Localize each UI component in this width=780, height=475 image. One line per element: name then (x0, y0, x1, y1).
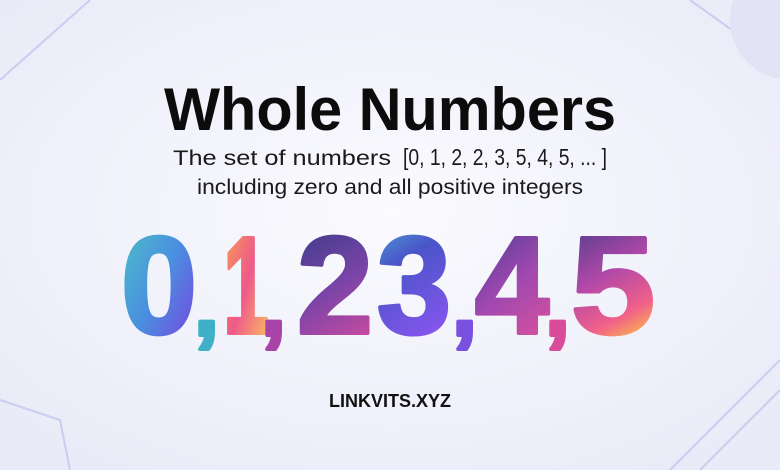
big digits: , (452, 255, 477, 355)
footer url: LINKVITS.XYZ (329, 391, 451, 411)
subtitle: The set of numbers (173, 147, 391, 170)
big digits: 4 (475, 209, 549, 363)
subtitle: including zero and all positive integers (197, 176, 583, 199)
big digits: 1 (223, 209, 269, 363)
big digits (121, 209, 655, 363)
big digits: 3 (377, 209, 451, 363)
big digits: , (545, 255, 570, 355)
big digits: 0 (121, 209, 197, 363)
big digits: , (261, 255, 286, 355)
big digits: 2 (297, 209, 373, 363)
big digits: , (194, 255, 219, 355)
subtitle (173, 144, 607, 199)
subtitle: [0, 1, 2, 2, 3, 5, 4, 5, ... ] (403, 144, 607, 170)
big digits: 5 (571, 209, 655, 363)
title: Whole Numbers (164, 76, 616, 143)
